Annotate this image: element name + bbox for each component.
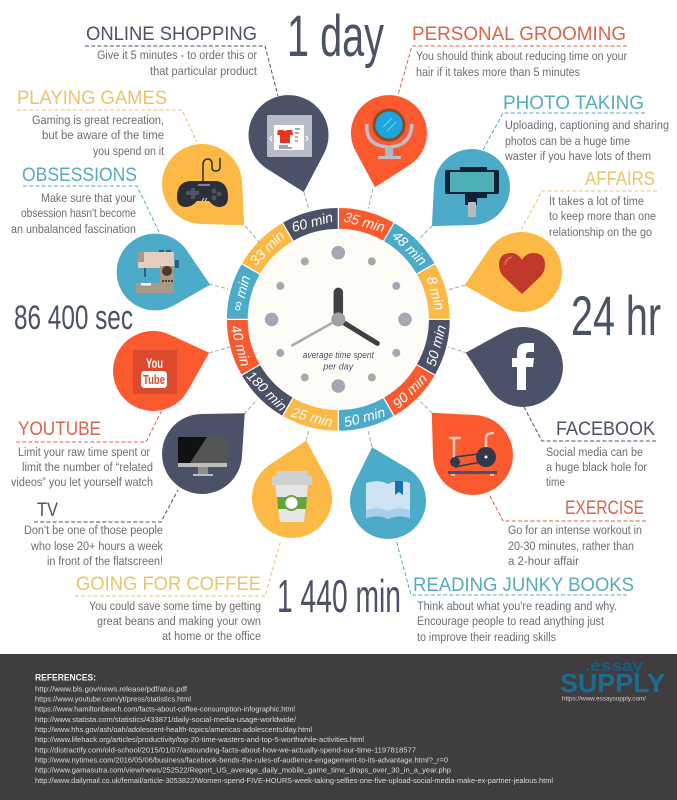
references list: http://www.lifehack.org/articles/productivity/top-20-time-wasters-and-top-5-worthwhile-activities.html [35, 735, 364, 744]
pin: going for coffee [244, 431, 345, 546]
callout: youtube [11, 410, 162, 489]
callout: tv [24, 490, 178, 568]
callout: going for coffee [75, 540, 281, 643]
callout: personal grooming [398, 24, 627, 95]
icon: youtube logo: You [146, 355, 163, 371]
title: 1 day: 1 day [287, 4, 384, 69]
ring labels: 33 min [246, 227, 288, 268]
callout: youtube: Limit your raw time spent or [18, 445, 150, 459]
stat: 86 400 sec: 86 400 sec [14, 299, 133, 337]
icon: heart [499, 253, 545, 294]
callout: photo taking: PHOTO TAKING [503, 93, 644, 114]
callout: tv: in front of the flatscreen! [47, 554, 163, 568]
ring labels: 180 min [244, 368, 290, 414]
icon: browser window with shirt [267, 115, 312, 157]
callout: photo taking: photos can be a huge time [505, 134, 630, 148]
callout: photo taking [483, 93, 669, 163]
callout: going for coffee: at home or the office [162, 629, 261, 643]
callout: photo taking: waster if you have lots of them [504, 149, 651, 163]
icon: monitor [178, 437, 227, 476]
hour dots [265, 246, 412, 393]
footer panel [0, 654, 677, 800]
callout: facebook: FACEBOOK [556, 419, 655, 440]
logo: essay supply [560, 658, 665, 702]
callout: online shopping [85, 24, 278, 96]
ring labels: 90 min [389, 370, 430, 411]
references list: https://www.youtube.com/yt/press/statistics.html [35, 694, 191, 704]
callout: affairs: AFFAIRS [585, 169, 655, 190]
references heading: REFERENCES: [35, 672, 96, 684]
callout: facebook: time [546, 475, 565, 489]
callout: reading junky books: READING JUNKY BOOKS [413, 575, 634, 596]
callout: playing games: you spend on it [93, 144, 164, 158]
callout: obsessions: an unbalanced fascination [11, 222, 136, 236]
icon: youtube logo: Tube [143, 372, 165, 387]
icon: mirror [367, 108, 412, 159]
callout: facebook: a huge black hole for [546, 460, 647, 474]
pin: facebook [456, 314, 571, 415]
references list: http://www.hhs.gov/ash/oah/adolescent-health-topics/americas-adolescents/day.html [35, 725, 312, 734]
callout: reading junky books: to improve their reading skills [417, 630, 556, 644]
callout: going for coffee: You could save some time by getting [89, 599, 261, 613]
ring labels: 60 min [290, 209, 335, 235]
clock caption: per day [322, 361, 354, 372]
callout: going for coffee: great beans and making your own [97, 614, 261, 628]
ring labels: 40 min [228, 323, 254, 368]
pin: personal grooming [338, 87, 435, 197]
ring labels [228, 209, 449, 430]
clock [213, 194, 463, 444]
callout: online shopping: ONLINE SHOPPING [86, 24, 257, 45]
icon: coffee cup [272, 471, 312, 522]
clock caption [303, 350, 374, 372]
clock hands [292, 292, 377, 345]
pin: playing games [145, 127, 272, 254]
callout: reading junky books [396, 540, 634, 644]
icon: selfie stick [445, 167, 499, 217]
references list: http://www.gamasutra.com/view/news/252522/Report_US_average_daily_mobile_game_time_drops_over_30_in_a_year.php [35, 766, 451, 775]
callout: going for coffee: GOING FOR COFFEE [76, 574, 261, 595]
callout: reading junky books: Think about what you're reading and why. [417, 599, 617, 613]
ring labels: 48 min [389, 227, 430, 269]
icon: open book [366, 481, 410, 519]
references list: https://www.hamiltonbeach.com/facts-about-coffee-consumption-infographic.html [35, 705, 295, 714]
callout: obsessions: obsession hasn't become [21, 206, 136, 220]
callout: personal grooming: You should think about reducing time on your [416, 49, 627, 63]
references list: http://distractify.com/old-school/2015/01/07/astounding-facts-about-how-we-actually-spend-our-time-1197818577 [35, 745, 416, 754]
pin: reading junky books [336, 436, 435, 548]
callout: facebook: Social media can be [546, 445, 643, 459]
icon: sewing machine [136, 250, 179, 293]
callout: tv: who lose 20+ hours a week [30, 539, 164, 553]
ring labels: ∞ min [228, 273, 253, 313]
pin: youtube [103, 315, 221, 421]
callout: obsessions [11, 165, 160, 236]
pin: obsessions [109, 226, 219, 322]
pin: exercise [403, 385, 530, 512]
callout: exercise: a 2-hour affair [508, 554, 579, 568]
references list: http://www.bls.gov/news.release/pdf/atus.pdf [35, 684, 188, 694]
callout: playing games: Gaming is great recreation, [32, 113, 164, 127]
clock caption: average time spent [303, 350, 374, 361]
references list: http://www.nytimes.com/2016/05/06/business/facebook-bends-the-rules-of-audience-engagement-to-its-advantage.html?_r=0 [35, 755, 448, 764]
callout: affairs: relationship on the go [549, 225, 652, 239]
callout: youtube: YOUTUBE [18, 419, 101, 440]
ring labels: 8 min [424, 275, 448, 312]
ring labels: 50 min [342, 404, 387, 430]
logo: essay supply: .essay [585, 658, 643, 675]
callout: youtube: videos” you let yourself watch [11, 475, 153, 489]
connectors from pins to ring [209, 189, 467, 447]
logo: essay supply: SUPPLY [560, 668, 665, 698]
ring labels: 35 min [342, 209, 387, 235]
icon: youtube logo [133, 350, 177, 394]
pin: tv [145, 384, 272, 511]
callout: affairs [520, 169, 657, 239]
callout: tv: TV [37, 500, 58, 521]
ring labels: 25 min [289, 404, 335, 430]
references list [35, 684, 553, 785]
references list: http://www.statista.com/statistics/433871/daily-social-media-usage-worldwide/ [35, 715, 297, 724]
callout: playing games: PLAYING GAMES [17, 88, 167, 109]
icon: gamepad [177, 158, 228, 207]
icon: exercise bike [448, 433, 497, 476]
clock face [246, 227, 430, 411]
callout: obsessions: OBSESSIONS [22, 165, 137, 186]
callout: exercise: Go for an intense workout in [508, 523, 642, 537]
callout: affairs: to keep more than one [549, 209, 656, 223]
callout: online shopping: that particular product [150, 64, 258, 78]
stat: 1 440 min: 1 440 min [277, 570, 401, 622]
callout: personal grooming: PERSONAL GROOMING [412, 24, 626, 45]
callout: personal grooming: hair if it takes more than 5 minutes [416, 65, 580, 79]
references list: http://www.dailymail.co.uk/femail/article-3053822/Women-spend-FIVE-HOURS-week-taking-selfies-one-five-upload-social-media-make-ex-partner-jealous.html [35, 776, 553, 785]
callout: reading junky books: Encourage people to read anything just [417, 614, 605, 628]
time ring [213, 194, 463, 444]
callout: facebook [524, 407, 656, 489]
callout: tv: Don't be one of those people [24, 523, 163, 537]
pin: photo taking [405, 133, 526, 253]
callout: youtube: limit the number of “related [22, 460, 153, 474]
callout: exercise [489, 494, 646, 568]
ring labels: 50 min [423, 323, 449, 368]
icon: facebook f [512, 343, 534, 390]
callout: obsessions: Make sure that your [41, 191, 136, 205]
callout: playing games: but be aware of the time [42, 128, 164, 142]
callout: exercise: EXERCISE [565, 498, 644, 519]
callout: exercise: 20-30 minutes, rather than [508, 539, 634, 553]
logo: essay supply: https://www.essaysupply.com/ [562, 696, 646, 702]
pin: online shopping [240, 86, 342, 202]
callout: playing games [17, 88, 197, 158]
pin: affairs [456, 224, 570, 324]
callout: affairs: It takes a lot of time [549, 194, 644, 208]
callout: online shopping: Give it 5 minutes - to order this or [97, 48, 257, 62]
